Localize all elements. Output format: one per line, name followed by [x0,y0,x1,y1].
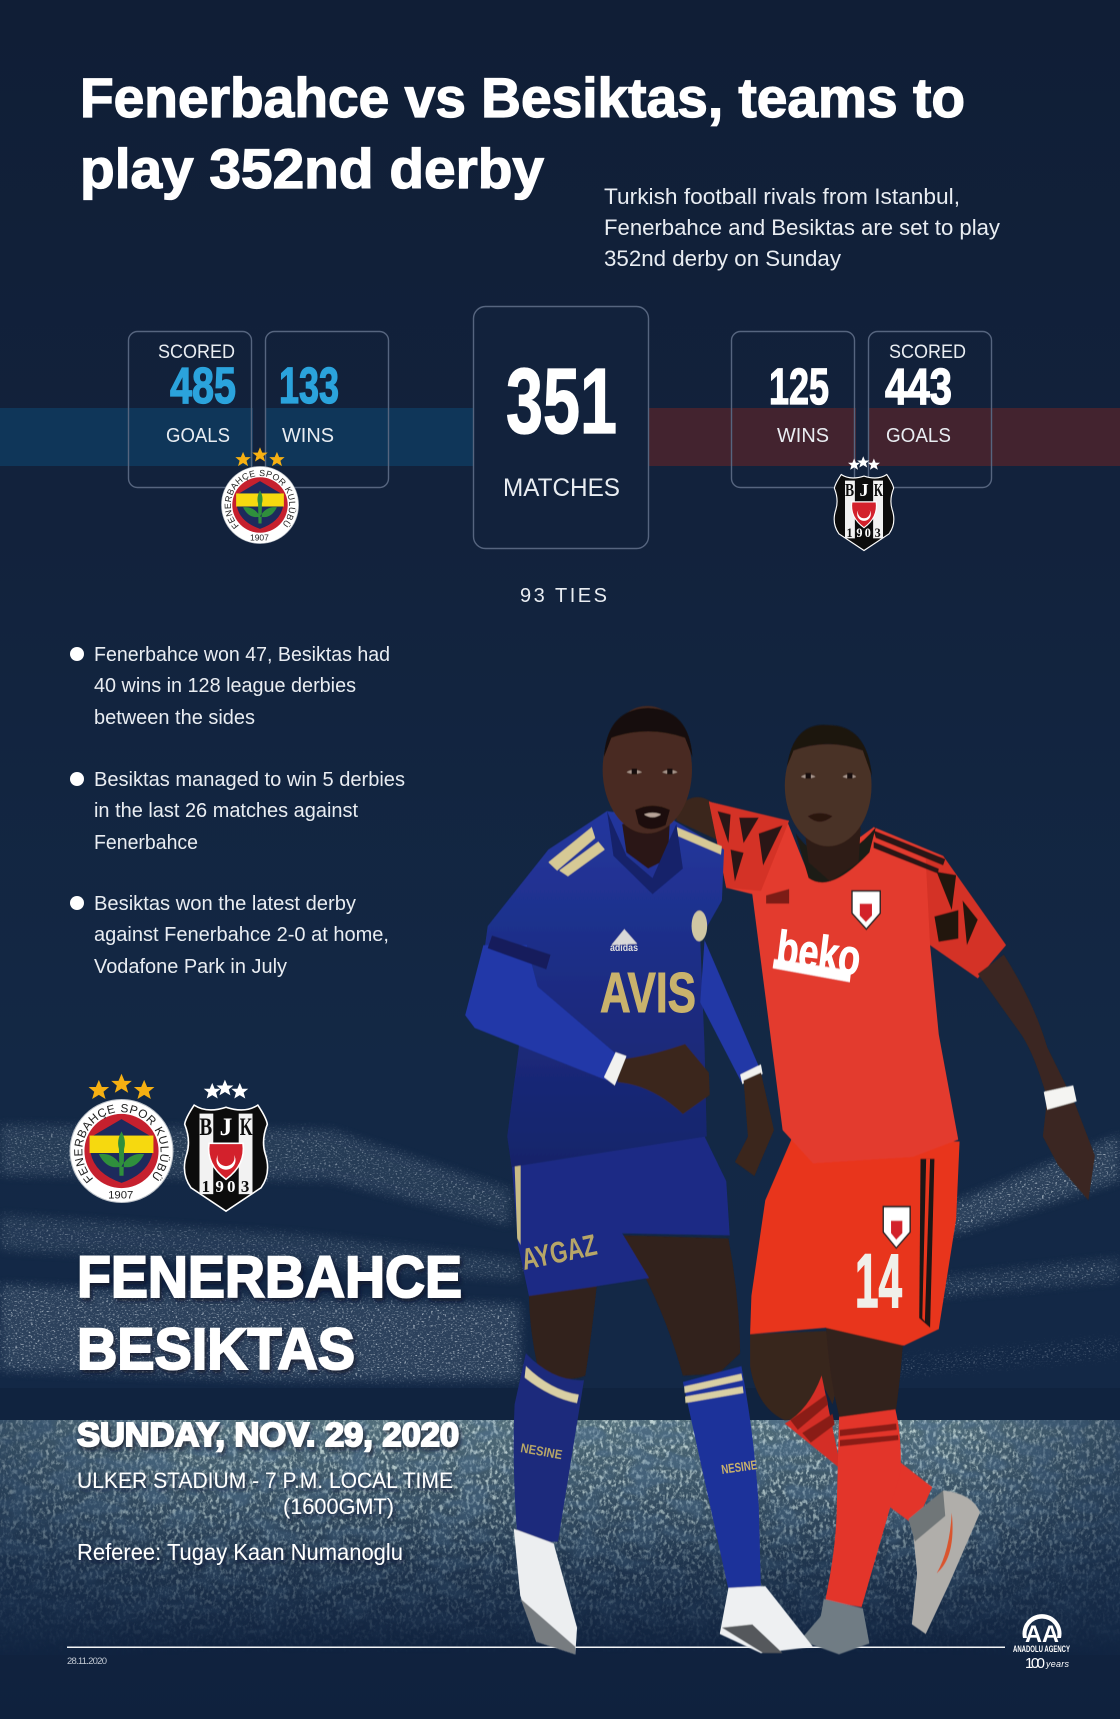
jersey [483,811,724,1167]
shorts crest [883,1207,910,1248]
title: play 352nd derby [80,137,544,200]
fact: last 26 matches: Fenerbahce [94,832,198,854]
icon: Besiktas crest large: 1 [202,1177,210,1196]
neck [622,821,670,869]
near sock [825,1409,901,1607]
head [603,706,692,834]
panel: Besiktas goals: SCORED [889,341,966,363]
sock sponsor right: NESINE [720,1457,758,1477]
arm [978,955,1095,1200]
pitch grass [0,1420,1120,1655]
sponsor: AVIS: AVIS [600,961,696,1025]
near thigh [826,1328,903,1423]
panel: Fenerbahce goals [128,332,252,488]
intro paragraph [604,184,1000,271]
venue and kick-off: (1600GMT) [283,1494,394,1519]
left boot [514,1529,577,1654]
intro paragraph: 352nd derby on Sunday [604,246,841,271]
stadium crowd tiers [0,1120,1120,1388]
icon: Besiktas crest large: J [220,1112,233,1141]
shirt number: 14 [855,1239,902,1324]
footer rule [67,1646,1005,1648]
logo: Anadolu Agency: ANADOLU AGENCY [1013,1644,1070,1655]
jersey crest [852,891,880,929]
jersey [709,802,1006,1163]
icon: Besiktas crest large: B [200,1112,212,1141]
fact: latest derby: Vodafone Park in July [94,956,287,978]
face [626,770,678,774]
sponsor: beko: beko [774,920,864,986]
venue and kick-off [77,1468,453,1519]
fact: last 26 matches: in the last 26 matches against [94,800,358,822]
match heading: BESIKTAS [77,1317,355,1382]
icon: Fenerbahce crest large: 1907 [108,1189,133,1201]
far sock [889,1459,932,1526]
sponsor underline [773,959,851,982]
left arm sleeve [465,945,616,1080]
fact: latest derby [70,893,389,978]
icon: Besiktas crest large: 0 [227,1177,236,1196]
referee: Referee: Tugay Kaan Numanoglu [77,1539,403,1565]
panel: total matches: MATCHES [503,474,620,502]
adidas mark [766,889,789,904]
right sleeve [700,940,759,1082]
shorts sponsor: AYGAZ [519,1229,600,1277]
fact list [70,644,405,978]
panel: Fenerbahce wins: WINS [282,425,334,447]
icon: Besiktas crest small: 1 [847,526,853,540]
band gaps [253,408,868,466]
head [785,725,872,846]
icon: Besiktas crest small: 3 [875,526,881,540]
icon: Fenerbahce crest small: 1907 [250,532,269,542]
icon: Besiktas crest small: K [874,480,884,500]
stadium backdrop [0,1050,1120,1655]
icon: Fenerbahce crest large [70,1074,174,1203]
panel: Besiktas wins [732,332,854,488]
icon: Fenerbahce crest large: FENERBAHÇE SPOR KULÜBÜ [74,1104,170,1184]
left hand [616,1044,710,1114]
sock sponsor left: NESINE [519,1440,564,1462]
icon: Besiktas crest large [184,1080,268,1211]
fact: latest derby: against Fenerbahce 2-0 at home, [94,924,389,946]
figure: Besiktas player in red [676,725,1095,1654]
right hand [735,1073,774,1176]
icon: Besiktas crest large: 3 [241,1177,249,1196]
logo: Anadolu Agency: 100 [1025,1655,1045,1672]
panel: Fenerbahce goals: GOALS [166,425,230,447]
icon: Fenerbahce crest small: FENERBAHÇE SPOR KULÜBÜ [224,470,296,530]
match heading: FENERBAHCE [77,1245,462,1310]
ties count: 93 TIES [520,585,607,607]
fact: latest derby: Besiktas won the latest derby [94,893,356,915]
icon: Besiktas crest large: 9 [215,1177,224,1196]
panel: Fenerbahce wins: 133 [279,357,339,414]
crest on jersey [692,911,707,941]
icon: Besiktas crest small: J [859,480,869,500]
icon: Besiktas crest small: B [845,480,854,500]
panel: Besiktas wins: 125 [769,358,829,415]
intro paragraph: Fenerbahce and Besiktas are set to play [604,215,1000,240]
figure: Fenerbahce player in blue [465,706,813,1654]
left leg [529,1283,597,1379]
sleeve patch [488,936,551,969]
right boot [720,1586,813,1653]
far thigh [750,1331,836,1420]
dark band above pitch [0,1388,1120,1420]
shorts [512,1136,730,1296]
fact: last 26 matches [70,769,405,854]
match heading [77,1245,462,1382]
fact: last 26 matches: Besiktas managed to win 5 derbies [94,769,405,791]
icon: Besiktas crest small [834,456,894,551]
sleeve pattern [709,802,789,891]
front boot [800,1599,869,1654]
logo: Anadolu Agency: AA [1025,1621,1059,1648]
fact: league derbies [70,644,390,729]
fact: league derbies: Fenerbahce won 47, Besiktas had [94,644,390,666]
intro paragraph: Turkish football rivals from Istanbul, [604,184,960,209]
logo: Anadolu Agency [1013,1614,1070,1672]
neck [804,827,861,881]
face [801,775,856,778]
panel: Fenerbahce wins [266,332,388,488]
back boot [912,1490,980,1634]
panel: total matches [474,306,648,548]
fact: league derbies: between the sides [94,707,255,729]
icon: Fenerbahce crest small [221,447,299,544]
panel: Fenerbahce goals: 485 [170,357,236,414]
panel: Besiktas wins: WINS [777,425,829,447]
title [80,66,965,200]
icon: Besiktas crest small: 9 [856,526,862,540]
match date: SUNDAY, NOV. 29, 2020 [77,1416,459,1453]
panel: Besiktas goals: GOALS [886,425,951,447]
adidas mark on jersey [611,929,637,945]
panel: Besiktas goals: 443 [885,358,952,415]
band: Besiktas colour [649,408,1120,466]
icon: Besiktas crest small: 0 [865,526,871,540]
venue and kick-off: ULKER STADIUM - 7 P.M. LOCAL TIME [77,1468,453,1493]
panel: Besiktas goals [868,332,992,488]
panel: total matches: 351 [506,349,617,453]
sponsor: adidas: adidas [610,943,638,954]
date stamp: 28.11.2020 [67,1656,107,1667]
logo: Anadolu Agency: years [1045,1659,1070,1669]
icon: Besiktas crest large: K [240,1112,253,1141]
fact: league derbies: 40 wins in 128 league derbies [94,675,356,697]
panel: Fenerbahce goals: SCORED [158,341,235,363]
arm behind [676,797,718,840]
title: Fenerbahce vs Besiktas, teams to [80,66,965,129]
band: Fenerbahce colour [0,408,473,466]
shorts [750,1140,960,1346]
right leg [622,1235,740,1376]
